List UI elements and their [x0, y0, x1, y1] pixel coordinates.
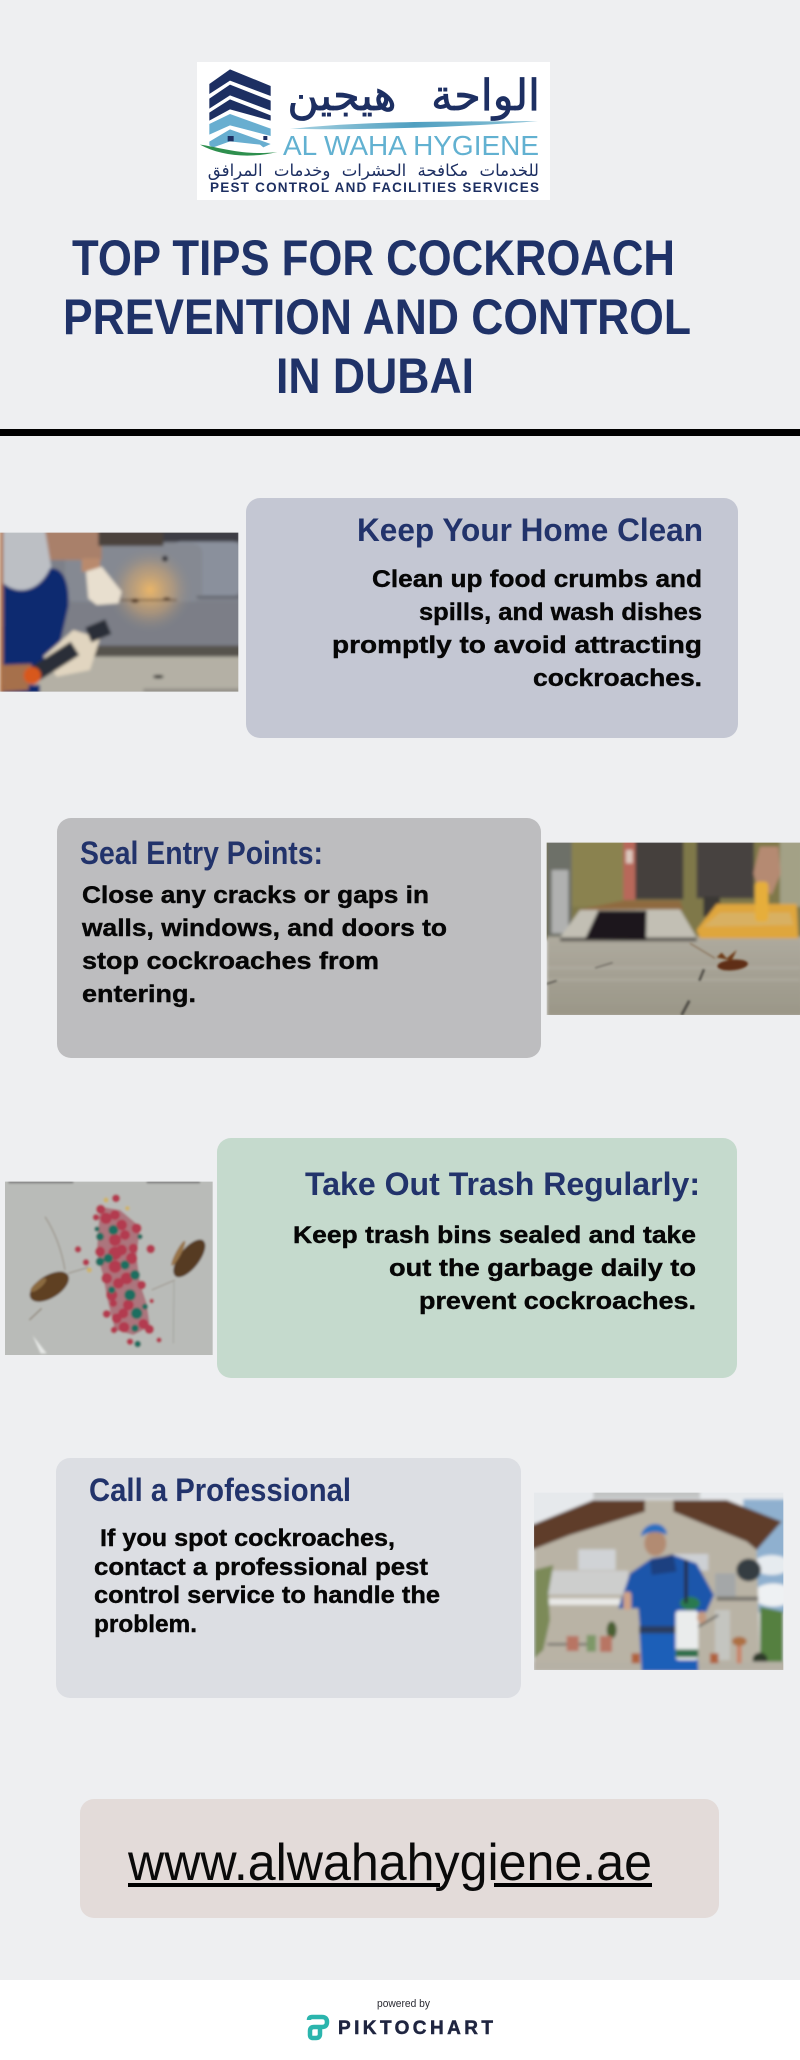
heading: Seal Entry Points: [80, 835, 323, 871]
logo: Al Waha Hygiene [197, 62, 550, 200]
body text [332, 566, 702, 692]
panel: website link [80, 1799, 719, 1918]
panel: take out trash regularly [217, 1138, 737, 1378]
heading: Call a Professional [89, 1472, 351, 1508]
icon: Piktochart logo [309, 2017, 327, 2038]
body text: out the garbage daily to [389, 1255, 696, 1282]
body text [293, 1222, 696, 1315]
body text: prevent cockroaches. [419, 1288, 696, 1315]
body text: Keep trash bins sealed and take [293, 1222, 696, 1249]
icon: building and house mark [200, 69, 277, 156]
body text: promptly to avoid attracting [332, 632, 702, 659]
body text: If you spot cockroaches, [100, 1525, 395, 1552]
photo: pest control worker with sprayer in front of a house [530, 1490, 793, 1673]
body text: contact a professional pest [94, 1554, 428, 1581]
body text [94, 1525, 440, 1638]
panel: keep your home clean [246, 498, 738, 738]
logo Arabic tagline: للخدمات مكافحة الحشرات وخدمات المرافق [208, 161, 539, 181]
body text: cockroaches. [533, 665, 702, 692]
wordmark: PIKTOCHART [338, 2018, 493, 2039]
title: PREVENTION AND CONTROL [63, 289, 691, 345]
logo services line: PEST CONTROL AND FACILITIES SERVICES [210, 180, 539, 195]
body text: stop cockroaches from [82, 948, 379, 975]
logo English name: AL WAHA HYGIENE [283, 130, 539, 161]
logo Arabic name: الواحة هيجين [287, 71, 540, 121]
title: IN DUBAI [276, 348, 474, 404]
body text: entering. [82, 981, 196, 1008]
photo: cockroaches beside coloured bait pellets [0, 1178, 220, 1358]
powered by label: powered by [377, 1998, 430, 2010]
logo swoosh [290, 121, 538, 129]
title: TOP TIPS FOR COCKROACH [72, 230, 675, 286]
body text: Close any cracks or gaps in [82, 882, 429, 909]
body text: problem. [94, 1611, 197, 1638]
body text: control service to handle the [94, 1582, 440, 1609]
heading: Take Out Trash Regularly: [305, 1166, 700, 1202]
heading: Keep Your Home Clean [357, 512, 703, 548]
photo: technician inspecting sofa with flashlight [0, 530, 247, 697]
photo: sweeping a dead cockroach with broom and dustpan [543, 840, 800, 1017]
title [63, 230, 691, 404]
panel: seal entry points [57, 818, 541, 1058]
footer: powered by Piktochart [0, 1980, 800, 2060]
body text: spills, and wash dishes [419, 599, 702, 626]
body text [81, 882, 447, 1008]
body text: Clean up food crumbs and [372, 566, 702, 593]
panel: call a professional [56, 1458, 521, 1698]
body text: walls, windows, and doors to [81, 915, 447, 942]
website address: www.alwahahygiene.ae [127, 1834, 652, 1892]
